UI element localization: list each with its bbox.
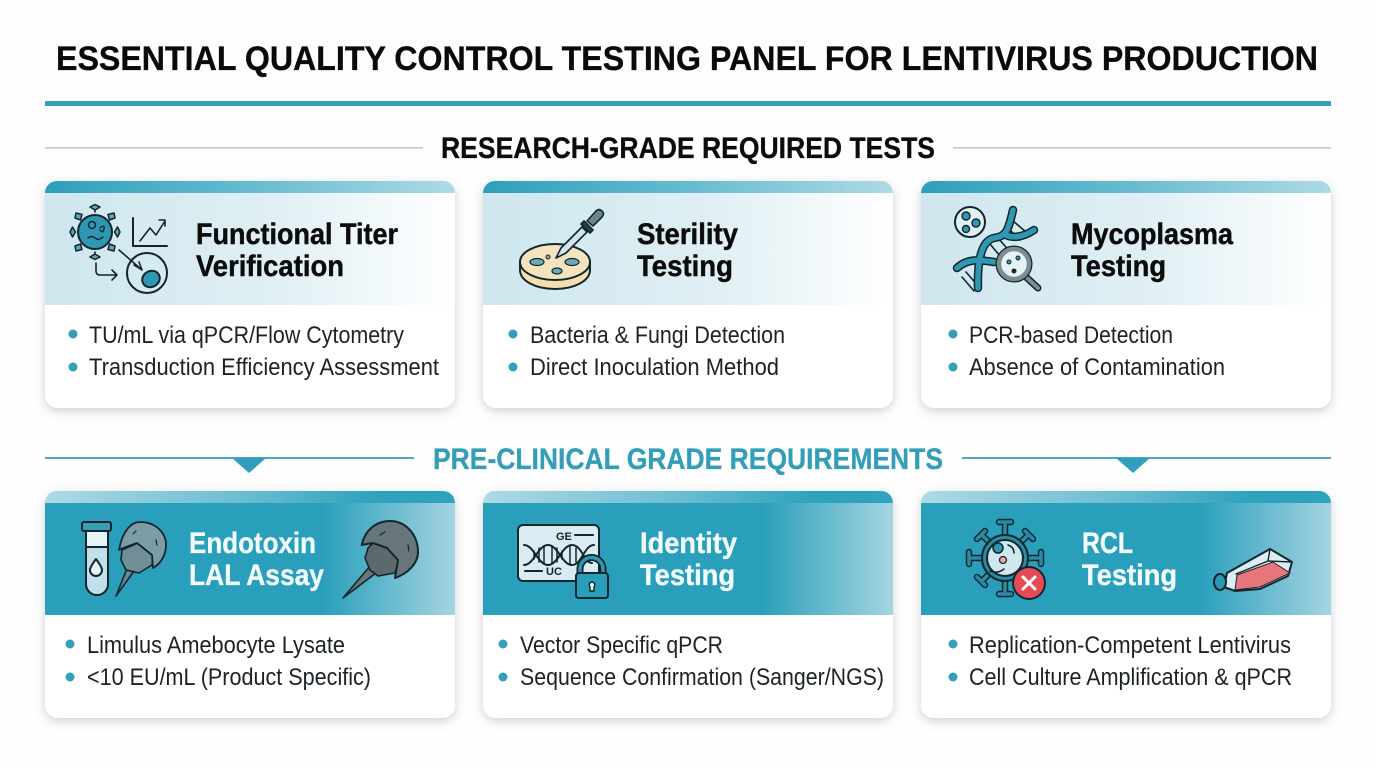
bullet list: Replication-Competent Lentivirus bbox=[969, 632, 1291, 659]
panel: functional titer verification bbox=[45, 181, 455, 408]
bullet list: Transduction Efficiency Assessment bbox=[89, 354, 439, 381]
heading: Testing bbox=[1071, 250, 1166, 283]
panel: RCL testing bbox=[921, 491, 1331, 718]
panel: endotoxin LAL assay bbox=[45, 491, 455, 718]
icon: sequence card and padlock bbox=[518, 525, 608, 598]
bullet list bbox=[68, 322, 439, 381]
heading bbox=[1082, 527, 1177, 592]
heading: Testing bbox=[637, 250, 733, 283]
heading: Verification bbox=[196, 250, 344, 283]
icon: virus, chart and target cell bbox=[70, 204, 167, 293]
heading: RCL bbox=[1082, 527, 1133, 560]
icon: cell culture flask bbox=[1214, 549, 1292, 591]
bullet list: <10 EU/mL (Product Specific) bbox=[87, 664, 371, 691]
bullet list: Cell Culture Amplification & qPCR bbox=[969, 664, 1292, 691]
heading: Identity bbox=[640, 527, 737, 560]
heading bbox=[640, 527, 737, 592]
bullet list: Direct Inoculation Method bbox=[530, 354, 779, 381]
bullet list: Sequence Confirmation (Sanger/NGS) bbox=[520, 664, 884, 691]
icon: mycoplasma cells, DNA helix and magnifier bbox=[955, 207, 1038, 291]
bullet list bbox=[508, 322, 785, 381]
heading: Testing bbox=[1082, 559, 1177, 592]
bullet list: Bacteria & Fungi Detection bbox=[530, 322, 785, 349]
heading bbox=[1071, 218, 1233, 283]
section heading: research-grade: RESEARCH-GRADE REQUIRED TESTS bbox=[441, 132, 935, 165]
heading: Sterility bbox=[637, 218, 738, 251]
section heading: pre-clinical grade bbox=[45, 443, 1331, 476]
icon: sequence card and padlock: UC bbox=[546, 566, 562, 578]
heading: Functional Titer bbox=[196, 218, 398, 251]
heading: Mycoplasma bbox=[1071, 218, 1233, 251]
bullet list: PCR-based Detection bbox=[969, 322, 1173, 349]
heading bbox=[196, 218, 398, 283]
bullet list: Limulus Amebocyte Lysate bbox=[87, 632, 345, 659]
bullet list: Vector Specific qPCR bbox=[520, 632, 723, 659]
bullet list: Absence of Contamination bbox=[969, 354, 1225, 381]
bullet list: TU/mL via qPCR/Flow Cytometry bbox=[89, 322, 404, 349]
bullet list bbox=[948, 632, 1292, 691]
icon: horseshoe crab bbox=[343, 521, 418, 598]
bullet list bbox=[948, 322, 1225, 381]
icon: test tube and horseshoe crab bbox=[82, 522, 166, 596]
heading: Endotoxin bbox=[189, 527, 316, 560]
heading: Testing bbox=[640, 559, 735, 592]
bullet list bbox=[498, 632, 884, 691]
icon: replication-competent virus with red cross bbox=[969, 522, 1045, 599]
heading: LAL Assay bbox=[189, 559, 324, 592]
panel: sterility testing bbox=[483, 181, 893, 408]
icon: petri dish and dropper bbox=[520, 210, 604, 289]
heading bbox=[637, 218, 738, 283]
section heading: pre-clinical grade: PRE-CLINICAL GRADE REQUIREMENTS bbox=[433, 443, 943, 476]
icon: sequence card and padlock: GE bbox=[556, 531, 572, 543]
heading bbox=[189, 527, 324, 592]
bullet list bbox=[66, 632, 371, 691]
panel: identity testing bbox=[483, 491, 893, 718]
panel: mycoplasma testing bbox=[921, 181, 1331, 408]
title: ESSENTIAL QUALITY CONTROL TESTING PANEL FOR LENTIVIRUS PRODUCTION bbox=[56, 40, 1318, 78]
